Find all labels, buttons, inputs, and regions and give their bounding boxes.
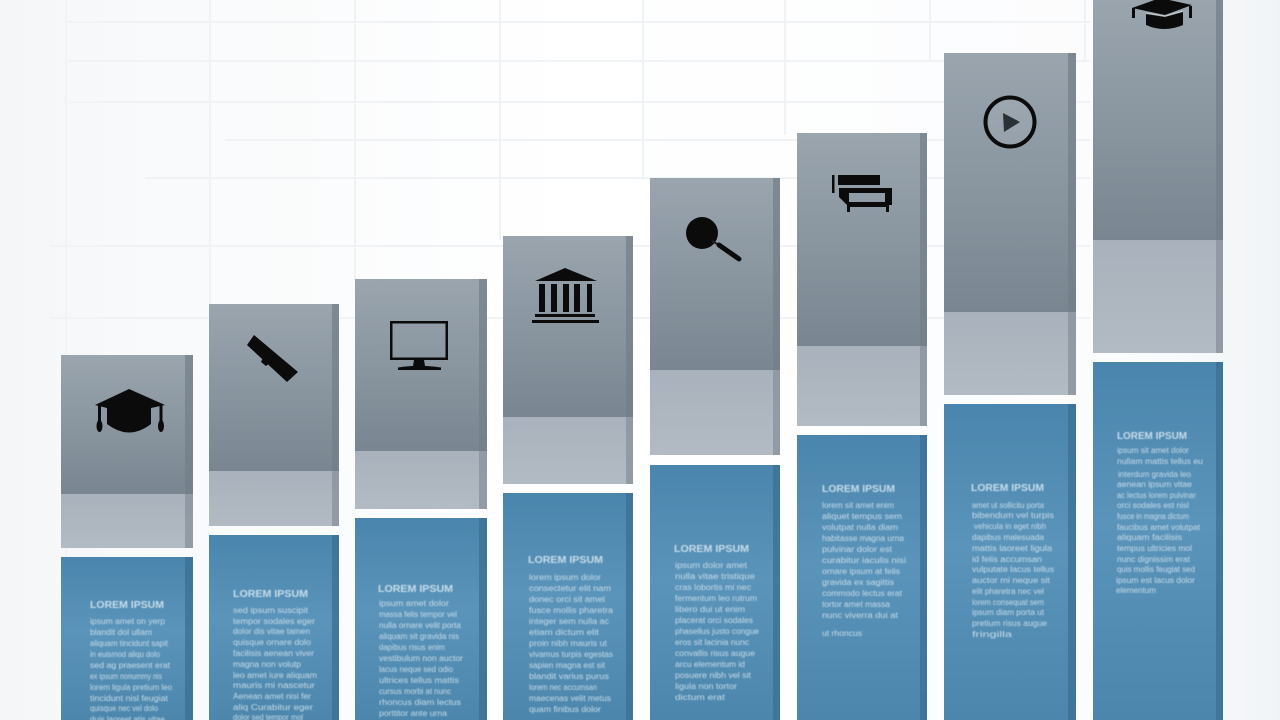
text block: bar 8: ipsum sit amet dolor [1117,446,1189,455]
text block: bar 7: ipsum diam porta ut [972,608,1045,617]
text block: bar 4: maecenas velit metus [529,694,611,703]
text block: bar 4: donec orci sit amet [529,595,606,604]
bar 8: mortarboard [1093,0,1223,720]
icon: diploma scroll [247,335,298,382]
text block: bar 2: mauris mi nascetur [233,681,315,690]
text block: bar 4: proin nibh mauris ut [529,639,608,648]
text block: bar 6: aliquet tempus sem [822,512,902,521]
text block: bar 2: tempor sodales eger [233,617,315,626]
text block: bar 7: lorem consequat sem [972,598,1044,607]
text block: bar 3: vestibulum non auctor [379,654,463,663]
text block: bar 2: aliq Curabitur eger [233,703,313,712]
text block: bar 8: aenean ipsum vitae [1117,480,1193,489]
text block: bar 7: elit pharetra nec vel [972,587,1044,596]
text block: bar 5: cras lobortis mi nec [675,583,751,592]
text block: bar 1: lorem ligula pretium leo [90,683,173,692]
text block: bar 6: ut rhoncus [822,629,862,638]
text block: bar 1: aliquam tincidunt sapit [90,639,169,648]
text block: bar 2: leo amet iure aliquam [233,671,317,680]
icon: institution building [532,268,599,323]
text block: bar 1: quisque nec vel dolo [90,704,159,713]
text block: bar 2: sed ipsum suscipit [233,606,309,615]
text block: bar 2: dolor dis vitae tamen [233,627,310,636]
bar 2: diploma [209,304,339,720]
text block: bar 4: vivamus turpis egestas [529,650,613,659]
text block: bar 2: magna non volutp [233,660,302,669]
text block: bar 4: LOREM IPSUM [528,555,603,566]
text block: bar 2 [233,589,317,720]
text block: bar 5: posuere nibh vel sit [675,671,752,680]
text block: bar 1: tincidunt nisl feugiat [90,694,169,703]
text block: bar 7: bibendum vel turpis [972,511,1054,520]
text block: bar 5: arcu elementum id [675,660,745,669]
text block: bar 8: LOREM IPSUM [1117,431,1187,442]
text block: bar 5: nulla vitae tristique [675,572,756,581]
text block: bar 2: quisque ornare dolo [233,638,312,647]
text block: bar 6: ornare ipsum at felis [822,567,900,576]
text block: bar 2: Aenean amet nisi fer [233,692,311,701]
text block: bar 8: orci sodales est nisl [1117,501,1189,510]
text block: bar 8: fusce in magna dictum [1117,512,1189,521]
bar 6: chat bubbles [797,133,927,720]
text block: bar 3: lacus neque sed odio [379,665,454,674]
text block: bar 8: ipsum est lacus dolor [1116,576,1195,585]
text block: bar 5 [674,544,760,702]
text block: bar 4: fusce mollis pharetra [529,606,614,615]
text block: bar 5: ipsum dolor amet [675,561,748,570]
text block: bar 8: nunc dignissim erat [1117,555,1191,564]
text block: bar 7: vehicula in eget nibh [974,522,1046,531]
text block: bar 8: tempus ultricies mol [1117,544,1192,553]
text block: bar 1: blandit dol ullam [90,628,152,637]
text block: bar 8: faucibus amet volutpat [1117,523,1201,532]
text block: bar 5: libero dui ut enim [675,605,745,614]
icon: mortarboard [1132,0,1192,29]
text block: bar 4: etiam dictum elit [529,628,600,637]
text block: bar 5: dictum erat [675,693,726,702]
text block: bar 5: convallis risus augue [675,649,756,658]
text block: bar 3: massa felis tempor vel [379,610,457,619]
text block: bar 6: lorem sit amet enim [822,501,894,510]
text block: bar 6: nunc viverra dui at [822,611,899,620]
bar 4: institution [503,236,633,720]
text block: bar 5: fermentum leo rutrum [675,594,757,603]
text block: bar 7: amet ut sollicitu porta [972,501,1045,510]
text block: bar 7: LOREM IPSUM [971,483,1044,494]
text block: bar 4: blandit varius purus [529,672,609,681]
text block: bar 3: dapibus risus enim [379,643,445,652]
text block: bar 3: rhoncus diam lectus [379,698,461,707]
text block: bar 6: pulvinar dolor est [822,545,893,554]
text block: bar 1 [90,600,173,720]
text block: bar 7: pretium risus augue [972,619,1048,628]
text block: bar 6: curabitur iaculis nisi [822,556,906,565]
text block: bar 1: LOREM IPSUM [90,600,164,611]
bar 5: magnifier [650,178,780,720]
text block: bar 7: fringilla [972,630,1013,639]
text block: bar 7: vulputate lacus tellus [972,565,1054,574]
text block: bar 5: phasellus justo congue [675,627,760,636]
text block: bar 3: ultrices tellus mattis [379,676,459,685]
text block: bar 3: nulla ornare velit porta [379,621,462,630]
text block: bar 8 [1116,431,1203,595]
bar 1: graduation cap [61,355,193,720]
text block: bar 2: LOREM IPSUM [233,589,308,600]
bar 7: play button [944,53,1076,720]
text block: bar 8: nullam mattis tellus eu [1117,457,1203,466]
icon: graduation cap [95,389,165,432]
text block: bar 1: in euismod aliqu dolo [90,650,161,659]
text block: bar 8: ac lectus lorem pulvinar [1117,491,1196,500]
text block: bar 3: ipsum amet dolor [379,599,449,608]
text block: bar 8: elementum [1116,586,1156,595]
text block: bar 5: eros sit lacinia nunc [675,638,749,647]
text block: bar 6 [822,484,906,638]
text block: bar 7: auctor mi neque sit [972,576,1051,585]
text block: bar 3: porttitor ante urna [379,709,448,718]
text block: bar 5: placerat orci sodales [675,616,753,625]
text block: bar 3: cursus morbi at nunc [379,687,451,696]
text block: bar 3: aliquam sit gravida nis [379,632,459,641]
text block: bar 8: quis mollis feugiat sed [1117,565,1195,574]
text block: bar 7: dapibus malesuada [972,533,1045,542]
text block: bar 1: ex ipsum nonummy nis [90,672,162,681]
text block: bar 4: lorem nec accumsan [529,683,597,692]
text block: bar 4: consectetur elit nam [529,584,611,593]
text block: bar 4: integer sem nulla ac [529,617,609,626]
text block: bar 5: LOREM IPSUM [674,544,749,555]
text block: bar 1: ipsum amet on yerp [90,617,166,626]
text block: bar 6: habitasse magna urna [822,534,905,543]
text block: bar 6: gravida ex sagittis [822,578,894,587]
text block: bar 1: sed ag praesent erat [90,661,171,670]
text block: bar 7 [971,483,1054,639]
text block: bar 4: lorem ipsum dolor [529,573,601,582]
icon: overlapping message panels [832,175,892,212]
text block: bar 8: aliquam facilisis [1117,533,1182,542]
text block: bar 6: volutpat nulla diam [822,523,898,532]
text block: bar 7: mattis laoreet ligula [972,544,1053,553]
text block: bar 4: quam finibus dolor [529,705,601,714]
text block: bar 5: ligula non tortor [675,682,737,691]
text block: bar 6: LOREM IPSUM [822,484,895,495]
icon: magnifying glass [686,217,739,259]
text block: bar 6: tortor amet massa [822,600,891,609]
icon: play circle [986,98,1034,146]
bar 3: monitor [355,279,487,720]
text block: bar 3: LOREM IPSUM [378,584,453,595]
text block: bar 8: interdum gravida leo [1118,470,1192,479]
text block: bar 7: id felis accumsan [972,555,1042,564]
text block: bar 4: sapien magna est sit [529,661,606,670]
text block: bar 2: facilisis aenean viver [233,649,314,658]
icon: monitor [390,321,448,370]
text block: bar 6: commodo lectus erat [822,589,903,598]
text block: bar 3 [378,584,463,718]
text block: bar 4 [528,555,614,714]
